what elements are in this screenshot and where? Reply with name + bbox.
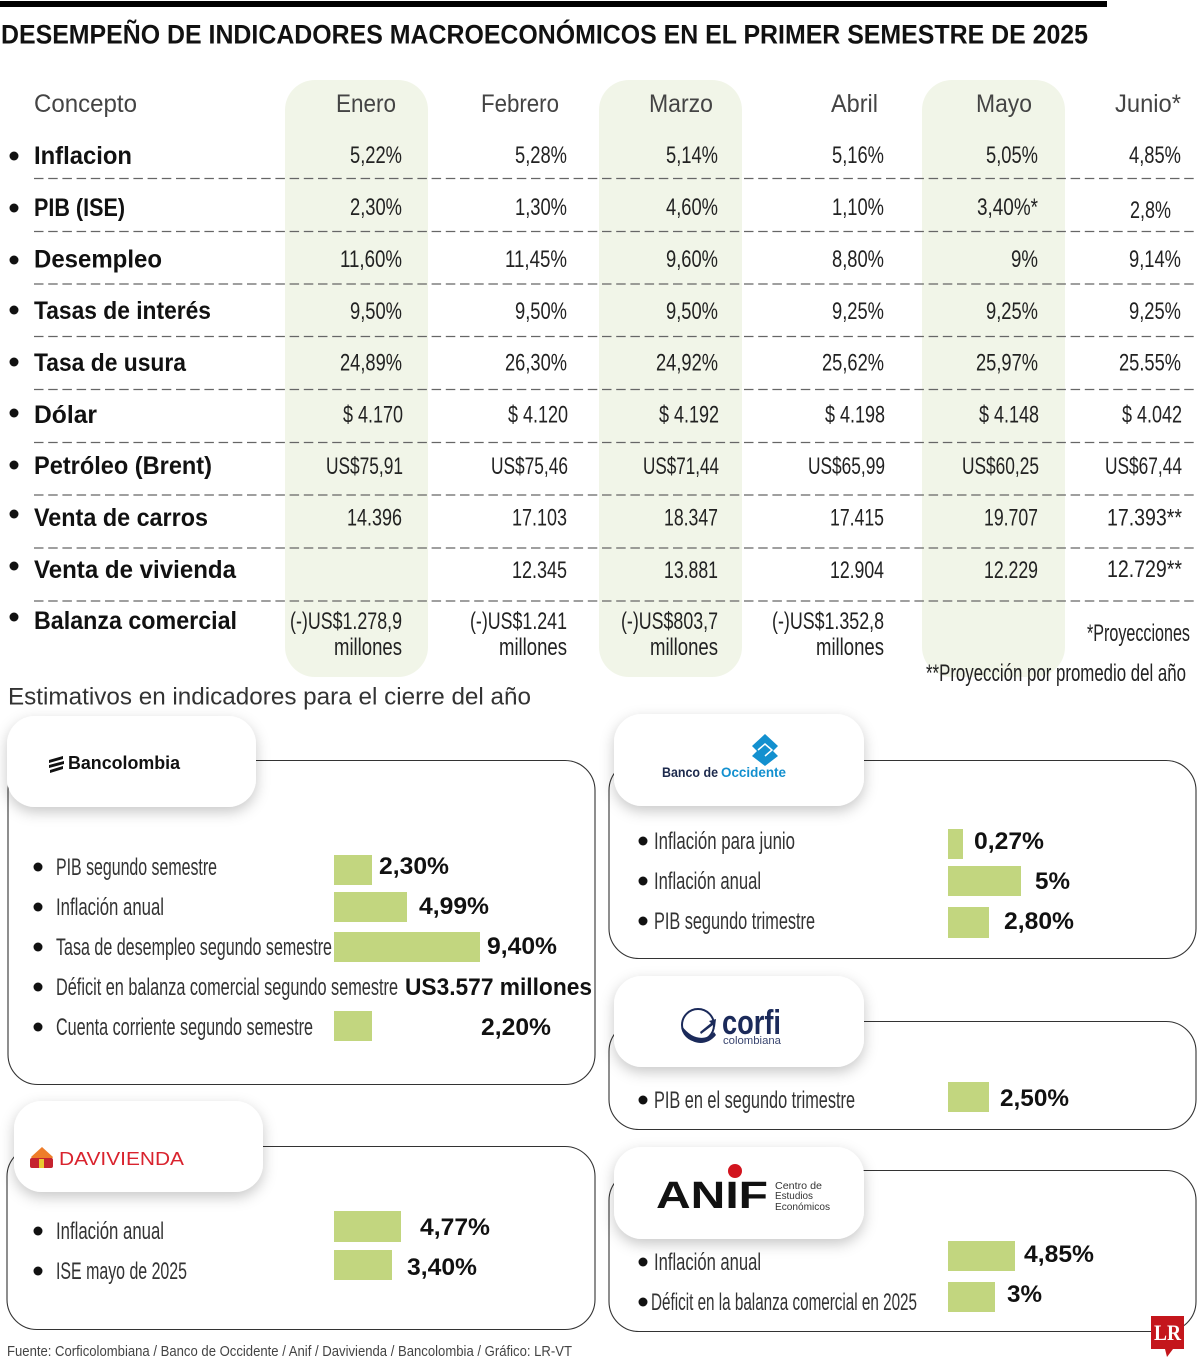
row: Petróleo (Brent): Petróleo (Brent) [34,452,212,480]
row: Balanza comercial: Balanza comercial [34,607,237,635]
row: Inflacion: 5,14% [666,142,718,169]
panel: Bancolombia [7,716,595,1084]
row: PIB segundo trimestre: PIB segundo trimestre [654,908,815,935]
row: Déficit en balanza comercial: US3.577 millones [405,974,592,1001]
row: ISE mayo de 2025 [34,1250,477,1285]
row: Dólar [10,401,1182,429]
logo: ANIF: Centro de [775,1180,822,1192]
row: Desempleo: Desempleo [34,246,162,274]
row: Cuenta corriente: 2,20% [481,1014,551,1041]
table header: Enero [336,90,396,118]
source line: Fuente: Corficolombiana / Banco de Occidente / Anif / Davivienda / Bancolombia / Gráfico: LR-VT [7,1343,572,1360]
row: PIB (ISE) [10,194,1171,224]
row: Petróleo (Brent) [10,452,1182,480]
title: DESEMPEÑO DE INDICADORES MACROECONÓMICOS EN EL PRIMER SEMESTRE DE 2025 [1,18,1088,50]
row: Dólar: $ 4.170 [343,402,403,428]
logo: Corficolombiana [682,1004,782,1047]
row: Tasa de desempleo: 9,40% [487,933,557,960]
row: Petróleo (Brent): US$71,44 [643,453,719,480]
row: Tasa de usura: 24,89% [340,350,402,376]
row: Balanza comercial: (-)US$1.278,9 [290,608,402,635]
table header: Concepto [34,90,137,118]
row: Petróleo (Brent): US$60,25 [962,453,1039,480]
row: Tasa de desempleo: Tasa de desempleo segundo semestre [56,934,332,961]
row: Tasa de usura: 26,30% [505,350,567,376]
logo: ANIF: Estudios [775,1190,813,1202]
row: Inflación anual [34,892,489,922]
row: Déficit en la balanza comercial: Déficit en la balanza comercial en 2025 [651,1289,917,1316]
table header: Abril [831,90,878,118]
row: Venta de carros: 18.347 [664,504,718,532]
row: PIB segundo semestre: 2,30% [379,853,449,880]
row: Inflacion: 5,28% [515,142,567,169]
row: ISE mayo de 2025: ISE mayo de 2025 [56,1258,187,1285]
panel: Corficolombiana [609,976,1196,1130]
row: Balanza comercial: millones [650,634,718,661]
row: PIB (ISE): 1,10% [832,194,884,221]
row: Venta de vivienda [10,556,1182,584]
logo: ANIF: ANIF [656,1175,768,1217]
row: Inflación anual: Inflación anual [654,868,761,895]
row: PIB (ISE): 2,8% [1130,197,1171,224]
row: Balanza comercial: millones [334,634,402,661]
logo: Davivienda: DAVIVIENDA [59,1149,184,1169]
row: PIB (ISE): 2,30% [350,194,402,221]
row: Balanza comercial [10,607,884,661]
table header: Junio* [1115,90,1181,118]
row: Tasas de interés: 9,25% [832,298,884,325]
row: Tasas de interés: 9,50% [515,298,567,325]
row: Déficit en la balanza comercial: 3% [1007,1281,1042,1308]
row: Desempleo: 9,14% [1129,246,1181,273]
row: Inflación anual: 4,77% [420,1214,490,1241]
panel: Davivienda [7,1101,595,1330]
logo: Banco de Occidente: Occidente [721,764,786,780]
row: PIB (ISE): 1,30% [515,194,567,221]
row: PIB segundo trimestre: 2,80% [1004,908,1074,935]
table header: Marzo [649,90,713,118]
section heading: Estimativos en indicadores para el cierre del año [8,684,531,710]
row: Venta de carros: Venta de carros [34,504,208,532]
row: Inflación para junio: Inflación para junio [654,828,795,855]
row: Venta de vivienda: 12.229 [984,557,1038,584]
row: Desempleo: 8,80% [832,246,884,273]
row: Cuenta corriente: Cuenta corriente segundo semestre [56,1014,313,1041]
row: Desempleo: 11,60% [340,246,402,273]
row: Tasa de usura [10,349,1181,377]
row: Venta de carros [10,504,1182,532]
row: Venta de vivienda: Venta de vivienda [34,556,237,584]
row: Tasas de interés: 9,25% [986,298,1038,325]
row: Inflación anual [34,1211,490,1245]
row: Balanza comercial: millones [816,634,884,661]
row: Desempleo: 9% [1011,246,1038,273]
row: Tasa de usura: Tasa de usura [34,349,187,377]
row: PIB (ISE): 4,60% [666,194,718,221]
row: PIB segundo semestre [34,853,449,885]
row: Tasa de usura: 25,97% [976,350,1038,376]
highlighted month columns [285,80,1065,677]
row: PIB (ISE): 3,40%* [977,194,1038,221]
row: Inflación anual [638,1241,1094,1276]
logo: Corficolombiana: colombiana [723,1035,782,1047]
row: Dólar: $ 4.120 [508,402,568,428]
row: Dólar: $ 4.148 [979,402,1039,428]
row: Desempleo [10,246,1181,274]
top rule [0,1,1107,7]
row: Petróleo (Brent): US$75,46 [491,453,568,480]
logo: ANIF: Económicos [775,1201,830,1213]
row: Cuenta corriente [34,1011,551,1041]
row: ISE mayo de 2025: 3,40% [407,1254,477,1281]
logo: Corficolombiana: corfi [722,1004,781,1042]
row: Inflacion: 5,05% [986,142,1038,169]
row: Inflación anual [638,866,1070,896]
row: Tasas de interés: 9,50% [666,298,718,325]
row: Inflación para junio [638,828,1044,859]
logo: Bancolombia: Bancolombia [68,753,181,773]
row: PIB en el segundo trimestre: PIB en el segundo trimestre [654,1087,855,1114]
row: Inflación anual: 5% [1035,868,1070,895]
row: Tasas de interés [10,297,1181,325]
row: PIB en el segundo trimestre: 2,50% [1000,1085,1069,1112]
row: PIB segundo semestre: PIB segundo semestre [56,854,217,881]
logo: Banco de Occidente: Banco de [662,764,718,780]
row: Tasa de usura: 25.55% [1119,350,1181,376]
row: Balanza comercial: (-)US$803,7 [621,608,718,635]
row: PIB segundo trimestre [638,907,1074,938]
logo: Davivienda [30,1147,184,1169]
row: Petróleo (Brent): US$75,91 [326,453,403,480]
logo: Banco de Occidente [662,734,786,780]
row: Venta de vivienda: 13.881 [664,557,718,584]
row: Venta de carros: 14.396 [347,504,402,532]
table header: Mayo [976,90,1032,118]
logo: ANIF [656,1164,830,1217]
row: Dólar: $ 4.192 [659,402,719,428]
row: Tasa de usura: 24,92% [656,350,718,376]
row: Tasa de usura: 25,62% [822,350,884,376]
panel: ANIF [609,1147,1196,1332]
row: Inflacion: 5,16% [832,142,884,169]
row: Venta de carros: 17.103 [512,504,567,532]
row: Inflacion [10,142,1181,170]
row: Inflación anual: 4,85% [1024,1241,1094,1268]
row: Desempleo: 9,60% [666,246,718,273]
icon: LR logo: LR [1154,1320,1182,1345]
row: Déficit en balanza comercial: Déficit en balanza comercial segundo semestre [56,974,398,1001]
row: Desempleo: 11,45% [505,246,567,273]
row: Inflación anual: Inflación anual [654,1249,761,1276]
row: Inflacion: 4,85% [1129,142,1181,169]
row: Venta de vivienda: 12.345 [512,557,567,584]
row: Balanza comercial: (-)US$1.352,8 [772,608,884,635]
row: PIB (ISE): PIB (ISE) [34,194,125,222]
icon: LR logo [1151,1316,1184,1357]
row: Inflacion: 5,22% [350,142,402,169]
row: Balanza comercial: millones [499,634,567,661]
row: Inflacion: Inflacion [34,142,132,170]
row: Venta de carros: 19.707 [984,504,1038,532]
row: Tasas de interés: Tasas de interés [34,297,211,325]
row: Dólar: Dólar [34,401,97,429]
table row dividers [34,178,1194,601]
footnotes [926,620,1190,687]
row: Inflación para junio: 0,27% [974,828,1044,855]
row: Venta de carros: 17.415 [830,504,884,532]
row: Tasas de interés: 9,25% [1129,298,1181,325]
panel: Banco de Occidente [609,714,1196,958]
row: Venta de vivienda: 12.904 [830,557,884,584]
row: Balanza comercial: (-)US$1.241 [470,608,567,635]
row: Inflación anual: Inflación anual [56,894,164,921]
row: Petróleo (Brent): US$65,99 [808,453,885,480]
row: Tasas de interés: 9,50% [350,298,402,325]
table header [34,90,1181,118]
row: Venta de vivienda: 12.729** [1107,556,1182,583]
row: Dólar: $ 4.198 [825,402,885,428]
row: Inflación anual: 4,99% [419,893,489,920]
row: Venta de carros: 17.393** [1107,504,1182,532]
row: Inflación anual: Inflación anual [56,1218,164,1245]
row: Dólar: $ 4.042 [1122,402,1182,428]
table header: Febrero [481,90,559,118]
row: PIB en el segundo trimestre [638,1082,1069,1114]
